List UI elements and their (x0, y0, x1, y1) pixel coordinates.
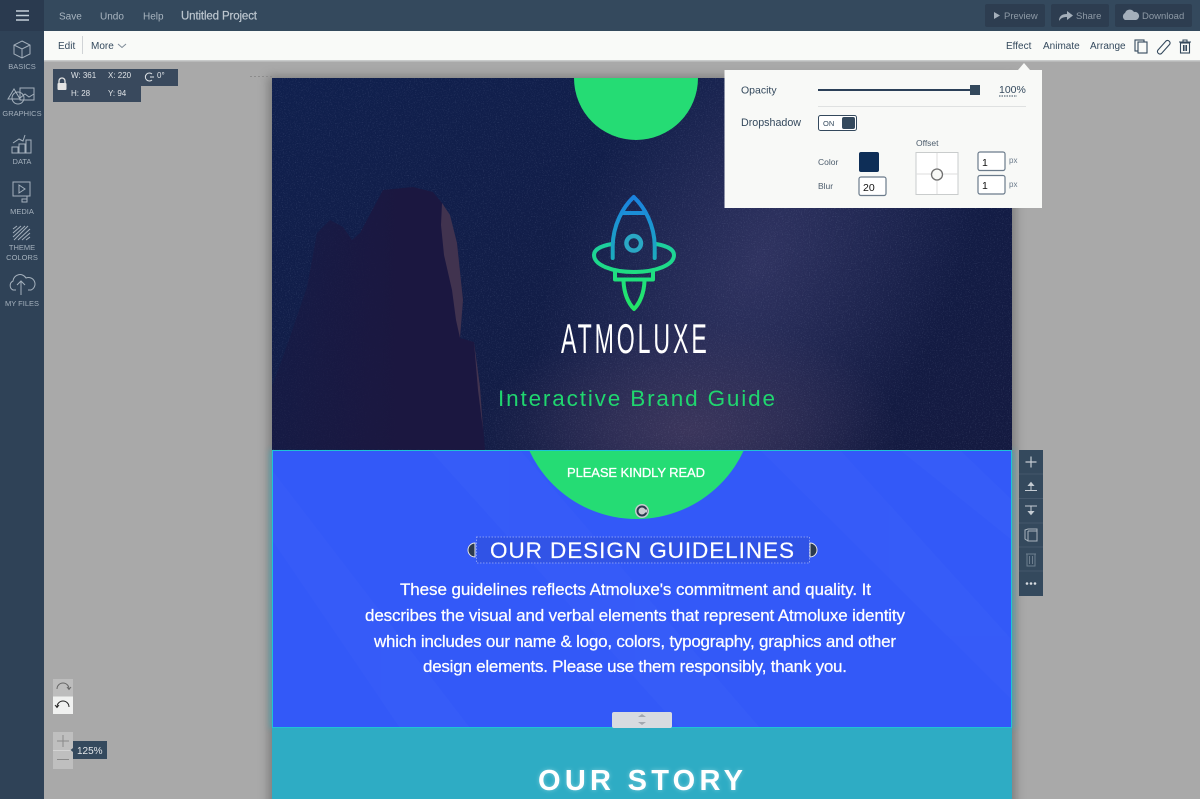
icon: delete (1026, 554, 1036, 566)
project title: Untitled Project (181, 10, 258, 22)
page drop shadow (268, 76, 1016, 799)
offset inputs: px (1009, 156, 1017, 165)
theme colors label: COLORS (6, 253, 38, 262)
our story heading: OUR STORY (538, 765, 743, 797)
panel: dimensions readout (53, 69, 178, 102)
icon: graphics (8, 88, 34, 104)
icon: plus (1026, 456, 1036, 468)
preview button (985, 4, 1045, 27)
subtitle: Interactive Brand Guide (498, 386, 775, 411)
readout values (71, 71, 165, 98)
data label: DATA (13, 157, 31, 166)
readout values: Y: 94 (108, 89, 127, 98)
offset inputs: px (1009, 180, 1017, 189)
theme colors label (6, 243, 38, 262)
offset inputs: 1 (982, 180, 988, 192)
download button (1115, 4, 1192, 27)
rock silhouette (272, 187, 485, 450)
icon: rotate handle (635, 504, 649, 518)
icon: redo (57, 683, 71, 690)
body text (365, 580, 906, 676)
body text: These guidelines reflects Atmoluxe's commitment and quality. It (400, 580, 871, 599)
readout values: W: 361 (71, 71, 97, 80)
zoom level: 125% (77, 746, 103, 757)
selection glow (270, 450, 1014, 728)
effect tabs: Animate (1043, 41, 1080, 52)
panel: zoom controls (53, 732, 107, 769)
icon: move down (1025, 506, 1037, 514)
menu items: Save (59, 12, 82, 22)
media label: MEDIA (10, 207, 34, 216)
blur input: Blur (818, 181, 833, 191)
offset inputs: 1 (982, 157, 988, 169)
menu items (59, 12, 164, 22)
icon: zoom out (57, 758, 69, 760)
color swatch (818, 152, 879, 172)
effect tabs: Arrange (1090, 41, 1126, 52)
selected heading: OUR DESIGN GUIDELINES (490, 538, 794, 563)
panel: our story section (272, 728, 1012, 799)
color swatch: Color (818, 157, 838, 167)
section resize handle (612, 712, 672, 728)
readout values: 0° (157, 71, 165, 80)
icon: theme colors (13, 226, 30, 240)
icon: data (12, 135, 31, 153)
icon: basics cube (14, 41, 30, 58)
preview button: Preview (1004, 11, 1038, 22)
effect tabs (1006, 41, 1126, 52)
readout values: H: 28 (71, 89, 91, 98)
icon: copy (1135, 40, 1147, 53)
icon: undo (55, 701, 69, 708)
body text: design elements. Please use them responsibly, thank you. (423, 657, 847, 676)
star speckle (272, 78, 1012, 450)
icon: link (1158, 40, 1170, 54)
menu button (0, 0, 44, 31)
basics label: BASICS (8, 62, 36, 71)
panel: left sidebar (0, 0, 44, 799)
blur input (818, 177, 886, 196)
my files label: MY FILES (5, 299, 39, 308)
theme colors label: THEME (9, 243, 35, 252)
section outline (272, 450, 1012, 728)
download button: Download (1142, 11, 1184, 22)
dropshadow label: Dropshadow (741, 117, 801, 129)
green semicircle: please read (530, 451, 744, 519)
icon: media (13, 182, 30, 202)
blur input: 20 (863, 182, 875, 194)
badge label: PLEASE KINDLY READ (567, 465, 705, 480)
share button: Share (1076, 11, 1101, 22)
icon: zoom in (57, 735, 69, 747)
offset picker: Offset (916, 138, 939, 148)
offset picker (916, 138, 958, 194)
panel: undo redo (53, 679, 73, 714)
graphics label: GRAPHICS (2, 109, 42, 118)
body text: describes the visual and verbal elements that represent Atmoluxe identity (365, 606, 906, 625)
dropshadow toggle (818, 116, 856, 130)
menu items: Undo (100, 12, 124, 22)
dropshadow toggle: ON (823, 119, 834, 128)
icon: lock (58, 78, 66, 90)
panel: section tools (1019, 450, 1043, 596)
panel: hero section (272, 78, 1012, 450)
panel: top bar (0, 0, 1200, 31)
effect tabs: Effect (1006, 41, 1032, 52)
icon: rotation (145, 73, 154, 81)
more dropdown: More (91, 41, 114, 52)
body text: which includes our name & logo, colors, typography, graphics and other (373, 632, 896, 651)
panel: secondary toolbar (44, 31, 1200, 62)
background rays (272, 450, 1012, 728)
milky way glow (528, 86, 921, 450)
offset inputs (978, 152, 1017, 194)
menu items: Help (143, 12, 164, 22)
panel: effect popover (724, 63, 1042, 208)
green semicircle: hero (574, 78, 698, 140)
panel: blue guidelines section (272, 450, 1012, 728)
opacity value: 100% (999, 84, 1026, 96)
opacity label: Opacity (741, 84, 777, 96)
icon: move up (1025, 482, 1037, 490)
more dropdown (82, 36, 126, 54)
icon: rocket logo (594, 197, 674, 309)
icon: trash (1179, 40, 1191, 53)
edit button: Edit (58, 41, 75, 52)
icon: my files cloud (10, 275, 35, 295)
opacity slider (818, 85, 980, 95)
logo wordmark: ATMOLUXE (561, 316, 707, 363)
icon: more (1026, 582, 1036, 585)
icon: duplicate (1025, 529, 1037, 541)
readout values: X: 220 (108, 71, 132, 80)
share button (1051, 4, 1109, 27)
